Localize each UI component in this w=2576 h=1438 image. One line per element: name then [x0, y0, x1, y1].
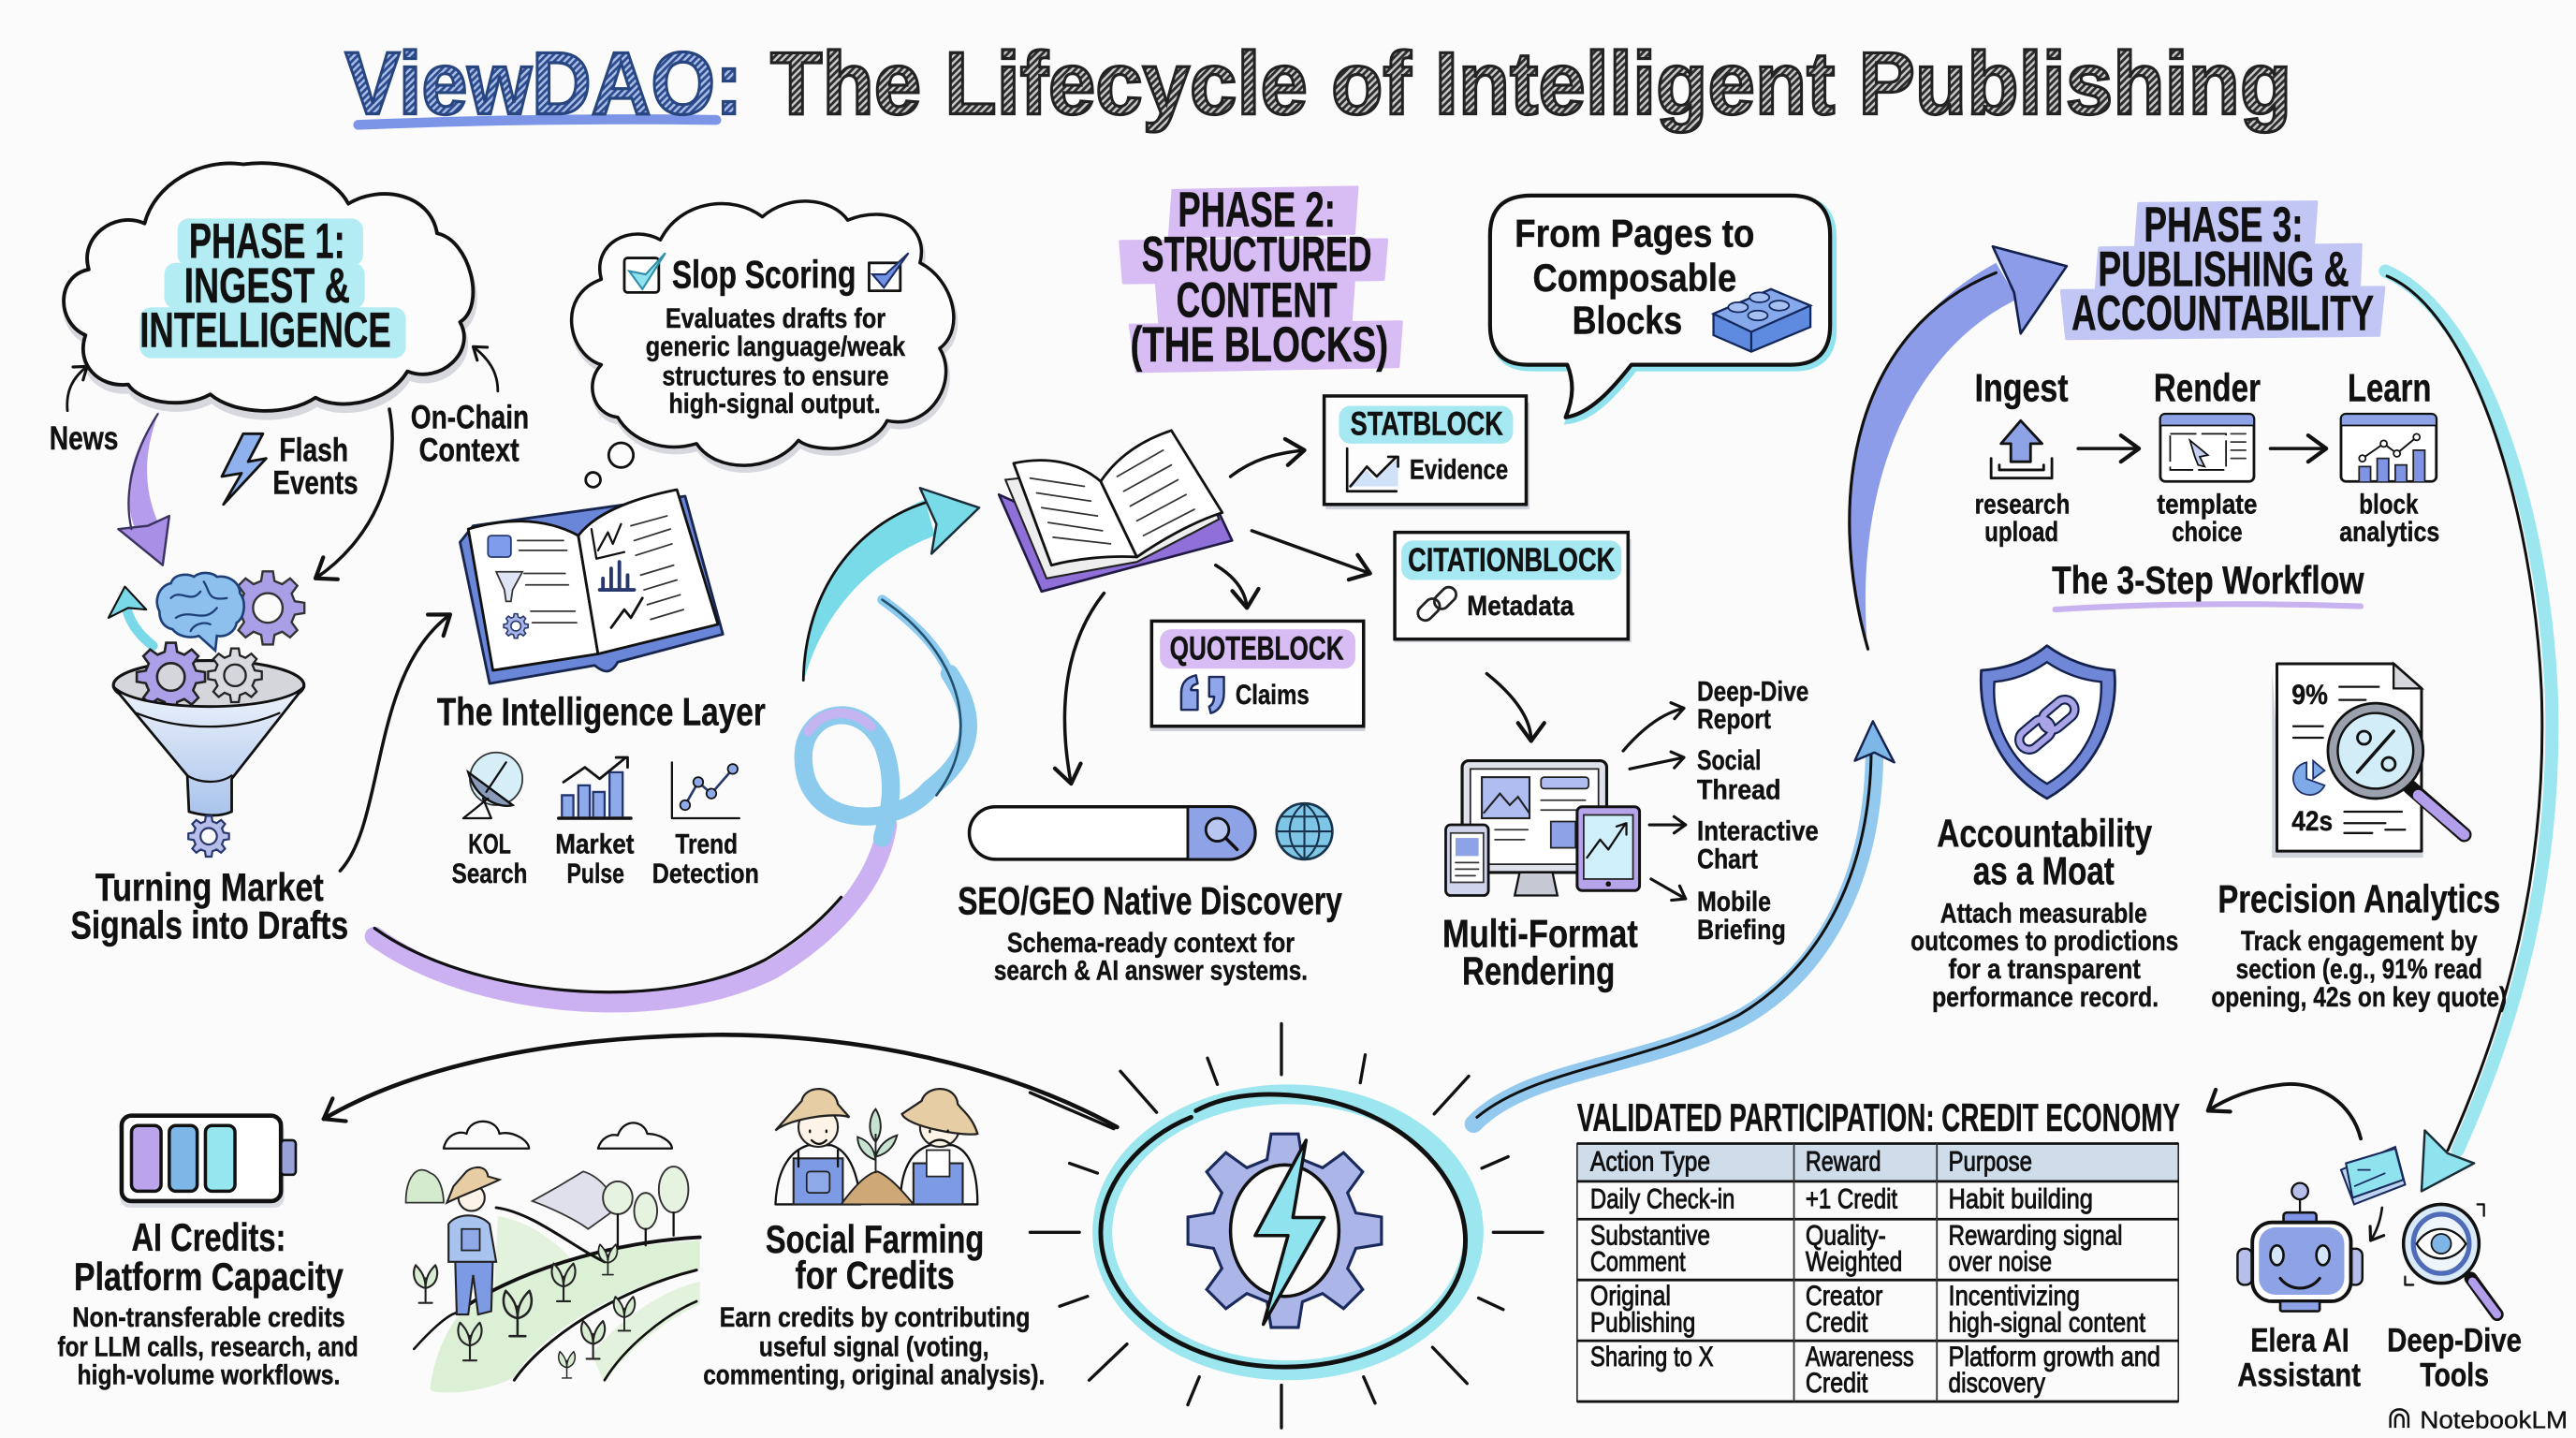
row: original publishing: Original	[1590, 1281, 1671, 1312]
panel: 3-step workflow: choice	[2172, 517, 2243, 548]
text: seo geo discovery: SEO/GEO Native Discovery	[958, 878, 1342, 922]
labels: intelligence tools: KOL	[468, 829, 511, 860]
logo: notebooklm: NotebookLM	[2420, 1405, 2568, 1433]
heading: phase 3	[2062, 198, 2384, 342]
row: substantive comment: Weighted	[1806, 1246, 1902, 1277]
icon: metadata link	[1415, 584, 1459, 624]
label: news with arrow: News	[50, 420, 118, 457]
heading: phase 2	[1120, 183, 1401, 373]
icon: quote marks	[1181, 675, 1224, 713]
icon: evidence chart	[1347, 448, 1398, 492]
icon: report with magnifier: 42s	[2291, 806, 2333, 837]
labels: output formats	[1697, 676, 1819, 946]
icon: market pulse chart	[559, 757, 631, 818]
icon: document card	[2341, 1147, 2405, 1240]
text: ai credits: AI Credits:	[131, 1215, 285, 1259]
row: original publishing: high-signal content	[1949, 1307, 2146, 1338]
arrows: book to blocks	[1064, 450, 1531, 784]
text: slop description: generic language/weak	[646, 331, 905, 362]
labels: output formats: Briefing	[1697, 915, 1786, 946]
text: social farming: Earn credits by contributing	[720, 1302, 1030, 1333]
heading: phase 1: PHASE 1:	[189, 213, 345, 269]
labels: intelligence tools	[452, 829, 759, 889]
panel: from pages to composable blocks callout	[1490, 196, 1834, 420]
labels: output formats: Interactive	[1697, 816, 1819, 847]
icon: central gear hub with ring and rays	[1030, 1023, 1543, 1428]
label: on-chain context with arrows: Context	[419, 432, 520, 468]
icon: analytics window	[2341, 414, 2437, 481]
title: The Lifecycle of Intelligent Publishing	[770, 35, 2291, 134]
text: seo geo discovery	[958, 878, 1342, 987]
heading: phase 2: (THE BLOCKS)	[1131, 317, 1388, 373]
icon: funnel with brain and gears	[109, 571, 304, 857]
panel: from pages to composable blocks callout: Composable	[1532, 256, 1736, 300]
panel: quoteblock: Claims	[1236, 680, 1310, 711]
labels: intelligence tools: Trend	[675, 829, 738, 860]
icon: upload	[1991, 420, 2052, 478]
text: slop description: structures to ensure	[662, 360, 889, 391]
text: seo geo discovery: Schema-ready context for	[1007, 928, 1295, 959]
label: on-chain context with arrows	[315, 346, 529, 579]
text: social farming	[703, 1217, 1045, 1390]
panel: slop scoring thought cloud: Slop Scoring	[672, 253, 856, 297]
panel: 3-step workflow: Learn	[2348, 366, 2431, 410]
labels: output formats: Report	[1697, 704, 1771, 735]
row: sharing to x: Awareness	[1806, 1342, 1914, 1372]
row: header: Action Type	[1590, 1146, 1710, 1177]
heading: phase 2: CONTENT	[1177, 273, 1338, 329]
panel: 3-step workflow	[1975, 366, 2439, 609]
icon: lightning with flash events label: Events	[272, 464, 359, 501]
arrow: cyan phase 3 to tools	[2385, 271, 2552, 1191]
text: ai credits: Platform Capacity	[74, 1255, 344, 1299]
arrow: purple and blue looping ribbon	[374, 600, 968, 1003]
label: on-chain context with arrows: On-Chain	[411, 399, 529, 435]
text: multi-format rendering: Multi-Format	[1442, 911, 1638, 955]
text: accountability as a moat: performance record.	[1932, 982, 2159, 1013]
labels: intelligence tools: Market	[555, 829, 635, 860]
text: turning market signals: Turning Market	[95, 865, 324, 909]
arrow: tools to credit economy	[2208, 1084, 2361, 1138]
panel: citationblock: Metadata	[1467, 591, 1574, 622]
arrows: render formats	[1623, 708, 1686, 899]
panel: citationblock: CITATIONBLOCK	[1408, 542, 1616, 579]
icon: shield with chain link	[1981, 646, 2115, 799]
arrow: blue to phase 3	[1849, 246, 2067, 653]
figure: farmer	[446, 1167, 500, 1314]
labels: assistant and tools	[2237, 1323, 2522, 1393]
labels: output formats: Deep-Dive	[1697, 676, 1808, 707]
panel: 3-step workflow: Render	[2154, 366, 2261, 410]
row: substantive comment: over noise	[1949, 1246, 2052, 1277]
heading: phase 3: PHASE 3:	[2144, 198, 2304, 253]
title: ViewDAO:	[345, 35, 742, 134]
icon: intelligence book	[460, 490, 723, 683]
text: multi-format rendering	[1442, 911, 1638, 993]
row: original publishing: Incentivizing	[1949, 1281, 2080, 1312]
icon: lightning with flash events label	[222, 432, 359, 505]
text: accountability as a moat: Accountability	[1937, 811, 2153, 855]
row: header: Purpose	[1949, 1146, 2032, 1177]
text: accountability as a moat: as a Moat	[1973, 849, 2115, 893]
panel: citationblock	[1395, 533, 1632, 642]
text: precision analytics: Precision Analytics	[2217, 877, 2500, 921]
text: ai credits: Non-transferable credits	[72, 1302, 345, 1333]
arrow: cyan to phase 2	[803, 488, 979, 681]
icon: battery	[120, 1116, 296, 1208]
text: social farming: Social Farming	[766, 1217, 984, 1261]
row: original publishing: Publishing	[1590, 1307, 1695, 1338]
text: social farming: useful signal (voting,	[759, 1332, 989, 1363]
icon: multi-format devices	[1445, 761, 1640, 895]
text: precision analytics: section (e.g., 91% read	[2236, 954, 2482, 985]
label: news with arrow	[50, 366, 118, 457]
labels: intelligence tools: Search	[452, 858, 527, 889]
row: sharing to x: Platform growth and	[1949, 1342, 2160, 1372]
text: slop description	[646, 303, 905, 419]
heading: phase 2: STRUCTURED	[1142, 227, 1372, 283]
icon: lightning with flash events label: Flash	[279, 432, 348, 468]
row: sharing to x	[1590, 1342, 2160, 1399]
labels: intelligence tools: Detection	[652, 858, 759, 889]
arrow: hub to ai credits	[324, 1034, 1117, 1127]
icon: lego brick	[1714, 289, 1810, 352]
icon: satellite dish	[463, 753, 522, 818]
text: accountability as a moat	[1910, 811, 2178, 1013]
row: original publishing	[1590, 1281, 2146, 1338]
row: sharing to x: Credit	[1806, 1368, 1868, 1399]
row: header: Reward	[1806, 1146, 1881, 1177]
text: accountability as a moat: Attach measurable	[1940, 898, 2147, 929]
heading: phase 2: PHASE 2:	[1178, 183, 1336, 238]
panel: 3-step workflow: research	[1975, 489, 2070, 520]
panel: quoteblock	[1150, 621, 1365, 731]
text: social farming: commenting, original analysis).	[703, 1359, 1045, 1390]
icon: trend detection chart	[672, 762, 739, 818]
panel: slop scoring thought cloud	[572, 201, 956, 487]
panel: 3-step workflow: block	[2359, 489, 2419, 520]
panel: phase 1 cloud	[64, 163, 475, 418]
panel: 3-step workflow: analytics	[2339, 517, 2439, 548]
panel: from pages to composable blocks callout: From Pages to	[1515, 212, 1754, 256]
arrow: purple down to funnel	[118, 411, 169, 565]
text: ai credits	[57, 1215, 359, 1390]
text: turning market signals: Signals into Drafts	[71, 903, 348, 947]
arrow: blue from hub to phase 3	[1473, 721, 1895, 1123]
text: precision analytics	[2211, 877, 2507, 1013]
row: substantive comment: Substantive	[1590, 1220, 1710, 1251]
icon: template window	[2160, 414, 2254, 481]
row: sharing to x: Sharing to X	[1590, 1342, 1714, 1372]
heading: phase 3: ACCOUNTABILITY	[2071, 286, 2374, 342]
row: substantive comment: Quality-	[1806, 1220, 1886, 1251]
icon: deep-dive magnifier	[2404, 1204, 2497, 1314]
icon: cyan checkbox	[624, 253, 666, 292]
table: credit economy	[1577, 1143, 2178, 1401]
text: ai credits: for LLM calls, research, and	[57, 1332, 359, 1363]
row: sharing to x: discovery	[1949, 1368, 2045, 1399]
row: substantive comment: Rewarding signal	[1949, 1220, 2123, 1251]
icon: blue checkbox	[869, 253, 909, 291]
row: daily check-in	[1590, 1184, 2093, 1215]
text: slop description: high-signal output.	[668, 389, 881, 419]
panel: from pages to composable blocks callout: Blocks	[1573, 299, 1682, 343]
arrow: drafts to intelligence layer	[340, 614, 450, 871]
row: daily check-in: Habit building	[1949, 1184, 2093, 1215]
icon: open book phase 2	[999, 431, 1232, 592]
text: accountability as a moat: for a transparent	[1949, 954, 2141, 985]
icon: search bar and globe	[970, 803, 1332, 859]
icon: robot assistant	[2237, 1183, 2363, 1312]
row: original publishing: Credit	[1806, 1307, 1868, 1338]
labels: output formats: Thread	[1697, 775, 1781, 806]
labels: assistant and tools: Assistant	[2237, 1357, 2361, 1393]
panel: statblock	[1325, 396, 1530, 509]
heading: phase 1: INTELLIGENCE	[139, 302, 391, 358]
panel: quoteblock: QUOTEBLOCK	[1170, 631, 1344, 668]
text: accountability as a moat: outcomes to prodictions	[1910, 926, 2178, 957]
text: precision analytics: opening, 42s on key quote)	[2211, 982, 2507, 1013]
panel: 3-step workflow: upload	[1984, 517, 2058, 548]
text: precision analytics: Track engagement by	[2241, 926, 2478, 957]
labels: output formats: Chart	[1697, 844, 1758, 874]
row: substantive comment	[1590, 1220, 2123, 1277]
row: daily check-in: +1 Credit	[1806, 1184, 1898, 1215]
labels: output formats: Social	[1697, 745, 1761, 776]
icon: report with magnifier	[2272, 664, 2465, 858]
illustration: farmer in field	[406, 1122, 700, 1393]
heading: validated participation: VALIDATED PARTICIPATION: CREDIT ECONOMY	[1577, 1095, 2180, 1139]
panel: 3-step workflow: template	[2157, 489, 2257, 520]
labels: assistant and tools: Deep-Dive	[2387, 1323, 2522, 1359]
icon: report with magnifier: 9%	[2291, 680, 2328, 711]
illustration: two farmers with plant	[775, 1089, 977, 1204]
panel: 3-step workflow: The 3-Step Workflow	[2052, 558, 2364, 602]
text: multi-format rendering: Rendering	[1462, 949, 1615, 993]
labels: assistant and tools: Tools	[2420, 1357, 2489, 1393]
panel: statblock: Evidence	[1410, 454, 1508, 485]
text: ai credits: high-volume workflows.	[78, 1359, 340, 1390]
text: seo geo discovery: search & AI answer systems.	[994, 956, 1308, 987]
row: substantive comment: Comment	[1590, 1246, 1686, 1277]
row: header	[1590, 1146, 2032, 1177]
text: turning market signals	[71, 865, 348, 947]
heading: phase 3: PUBLISHING &	[2098, 242, 2349, 297]
labels: intelligence tools: Pulse	[567, 858, 624, 889]
labels: output formats: Mobile	[1697, 887, 1771, 917]
panel: statblock: STATBLOCK	[1351, 405, 1503, 442]
row: daily check-in: Daily Check-in	[1590, 1184, 1734, 1215]
text: slop description: Evaluates drafts for	[666, 303, 886, 334]
text: social farming: for Credits	[795, 1253, 955, 1297]
row: original publishing: Creator	[1806, 1281, 1882, 1312]
heading: phase 1: INGEST &	[184, 258, 350, 314]
panel: 3-step workflow: Ingest	[1975, 366, 2069, 410]
heading: the intelligence layer: The Intelligence Layer	[437, 689, 766, 733]
labels: assistant and tools: Elera AI	[2250, 1323, 2349, 1359]
heading: phase 1	[139, 213, 391, 358]
